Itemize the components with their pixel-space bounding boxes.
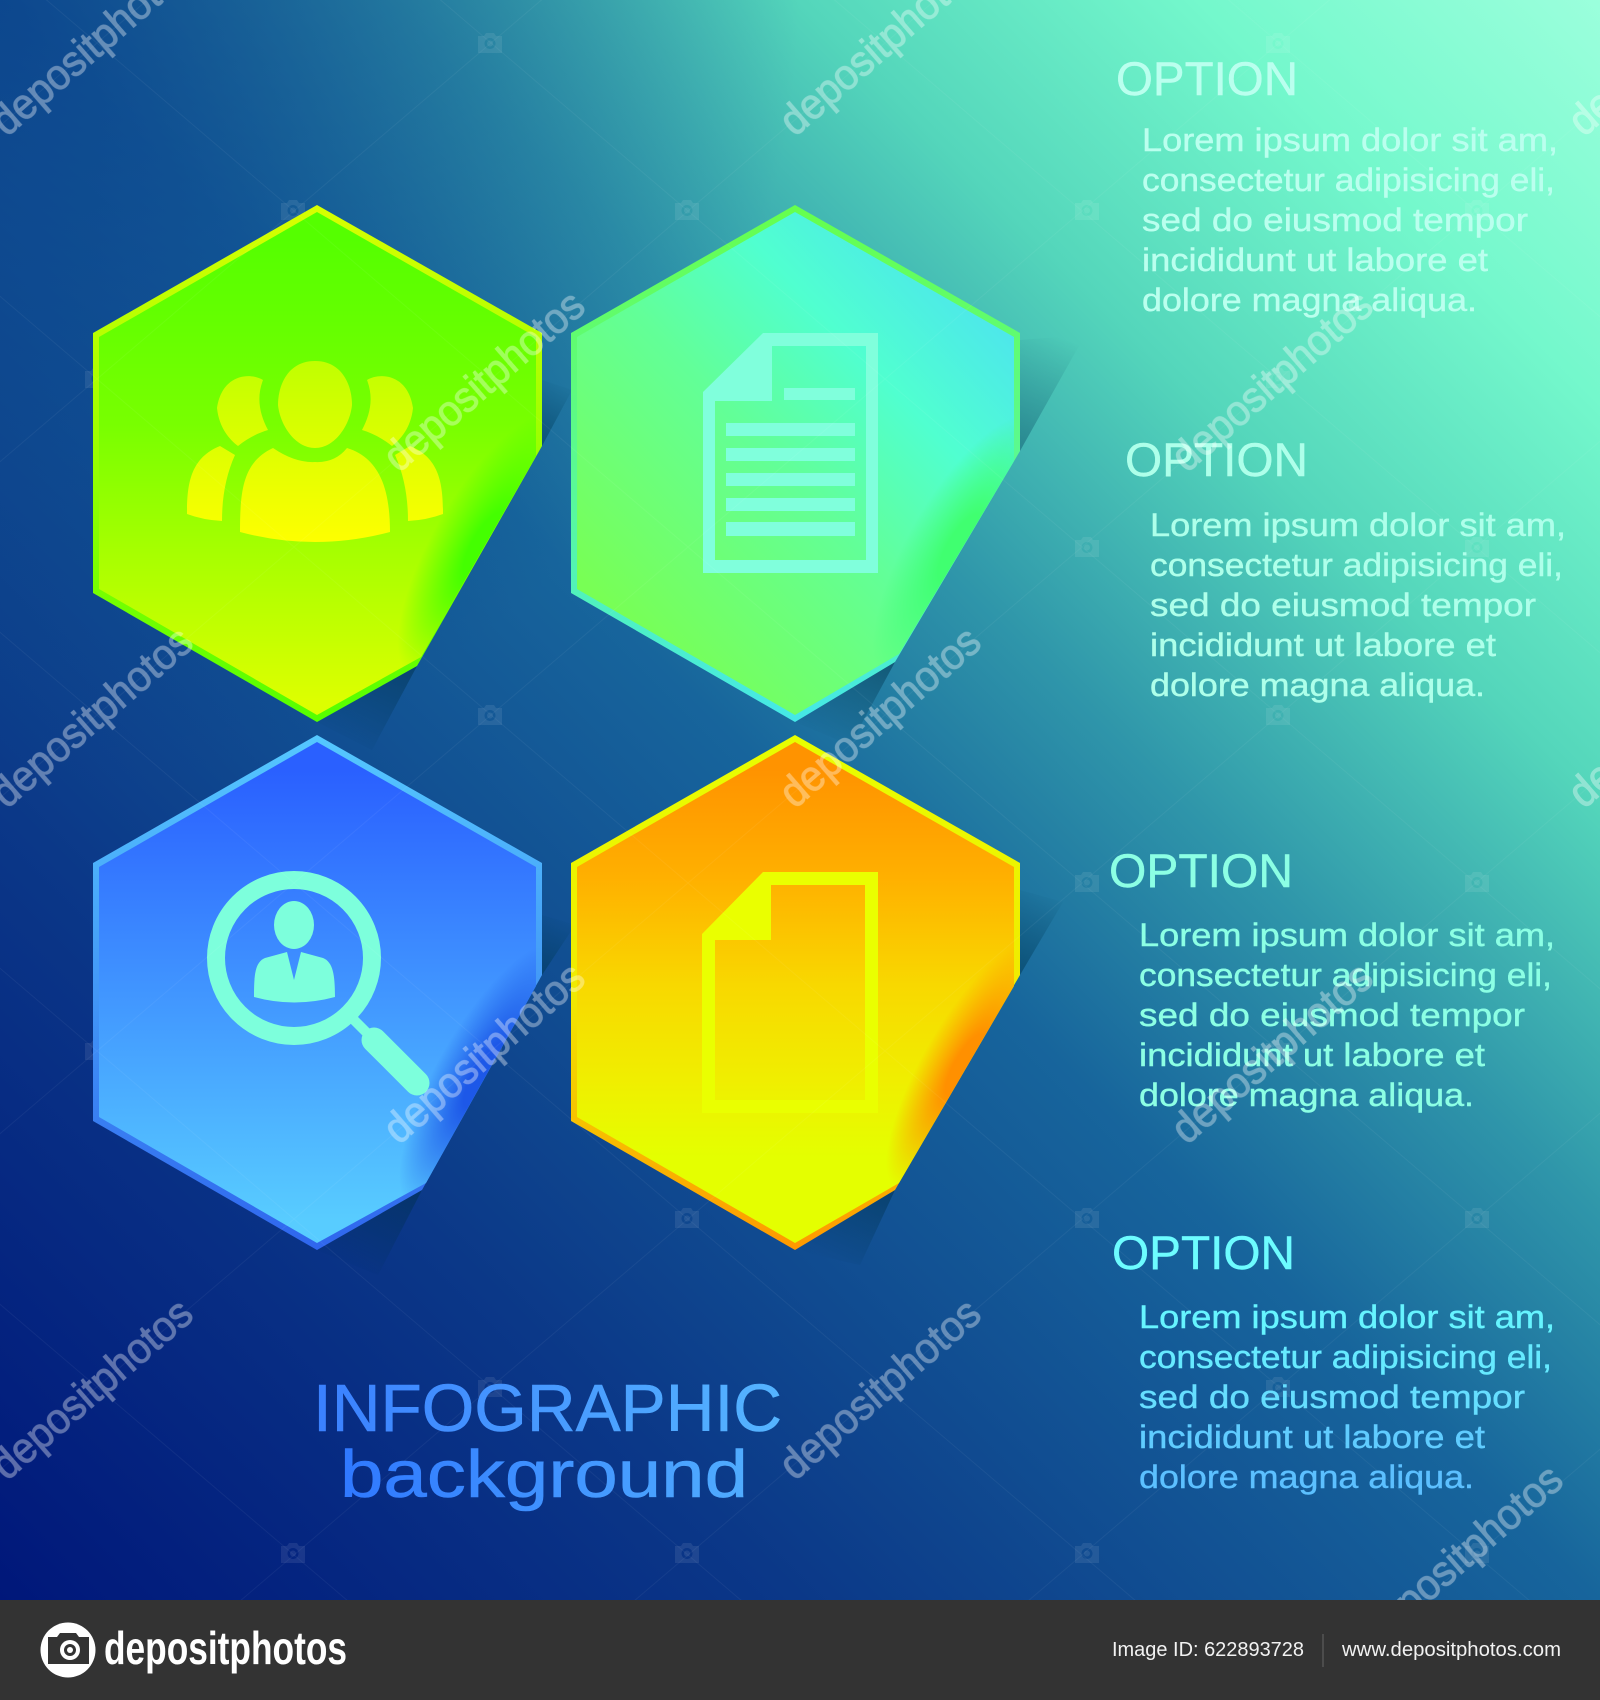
- text block: option 1: sed do eiusmod tempor: [1142, 202, 1528, 238]
- text block: option 4: consectetur adipisicing eli,: [1139, 1339, 1552, 1375]
- text block: option 2: incididunt ut labore et: [1150, 627, 1496, 663]
- watermark pattern: [85, 33, 1489, 1563]
- text block: option 3: Lorem ipsum dolor sit am,: [1139, 917, 1555, 953]
- text block: option 4: incididunt ut labore et: [1139, 1419, 1485, 1455]
- title: background: [340, 1437, 748, 1512]
- text block: option 4: dolore magna aliqua.: [1139, 1459, 1474, 1495]
- text block: option 1: consectetur adipisicing eli,: [1142, 162, 1555, 198]
- text block: option 1: [1116, 52, 1558, 318]
- text block: option 1: dolore magna aliqua.: [1142, 282, 1477, 318]
- icon: depositphotos logo: [40, 1622, 96, 1678]
- panel: mint hexagon with document icon: [571, 205, 1020, 722]
- icon: magnifier with person: [216, 880, 417, 1083]
- text block: option 4: [1112, 1226, 1555, 1495]
- image id: Image ID: 622893728: [1112, 1639, 1304, 1661]
- text block: option 1: OPTION: [1116, 52, 1298, 105]
- icon: group of people: [187, 361, 443, 542]
- watermark text: depositphotos: [770, 617, 990, 817]
- watermark text: depositphotos: [1162, 281, 1382, 481]
- text block: option 4: Lorem ipsum dolor sit am,: [1139, 1299, 1555, 1335]
- text block: option 4: OPTION: [1112, 1226, 1295, 1279]
- text block: option 1: incididunt ut labore et: [1142, 242, 1488, 278]
- panel: green hexagon with people icon: [93, 205, 542, 722]
- text block: option 4: sed do eiusmod tempor: [1139, 1379, 1525, 1415]
- panel: blue hexagon with magnifier icon: [93, 735, 542, 1250]
- watermark text: depositphotos: [374, 953, 594, 1153]
- text block: option 2: OPTION: [1125, 433, 1308, 486]
- text block: option 2: dolore magna aliqua.: [1150, 667, 1485, 703]
- text block: option 3: consectetur adipisicing eli,: [1139, 957, 1552, 993]
- website url: www.depositphotos.com: [1341, 1639, 1561, 1661]
- footer bar: [0, 1600, 1600, 1700]
- text block: option 3: dolore magna aliqua.: [1139, 1077, 1474, 1113]
- text block: option 1: Lorem ipsum dolor sit am,: [1142, 122, 1558, 158]
- text block: option 3: [1109, 844, 1555, 1113]
- text block: option 3: incididunt ut labore et: [1139, 1037, 1485, 1073]
- logo wordmark: depositphotos: [104, 1622, 347, 1674]
- title: INFOGRAPHIC: [313, 1371, 782, 1446]
- title: [313, 1371, 782, 1512]
- icon: document with lines: [703, 333, 878, 573]
- hexagon shadows: [317, 335, 1085, 1275]
- watermark text: depositphotos: [1352, 1455, 1572, 1655]
- text block: option 2: sed do eiusmod tempor: [1150, 587, 1536, 623]
- text block: option 3: OPTION: [1109, 844, 1293, 897]
- watermark text: depositphotos: [1162, 953, 1382, 1153]
- text block: option 3: sed do eiusmod tempor: [1139, 997, 1525, 1033]
- watermark text: depositphotos: [770, 1289, 990, 1489]
- text block: option 2: Lorem ipsum dolor sit am,: [1150, 507, 1566, 543]
- icon: blank document: [702, 872, 878, 1113]
- panel: orange hexagon with blank document icon: [571, 735, 1020, 1250]
- watermark text: depositphotos: [374, 281, 594, 481]
- text block: option 2: consectetur adipisicing eli,: [1150, 547, 1563, 583]
- text block: option 2: [1125, 433, 1566, 703]
